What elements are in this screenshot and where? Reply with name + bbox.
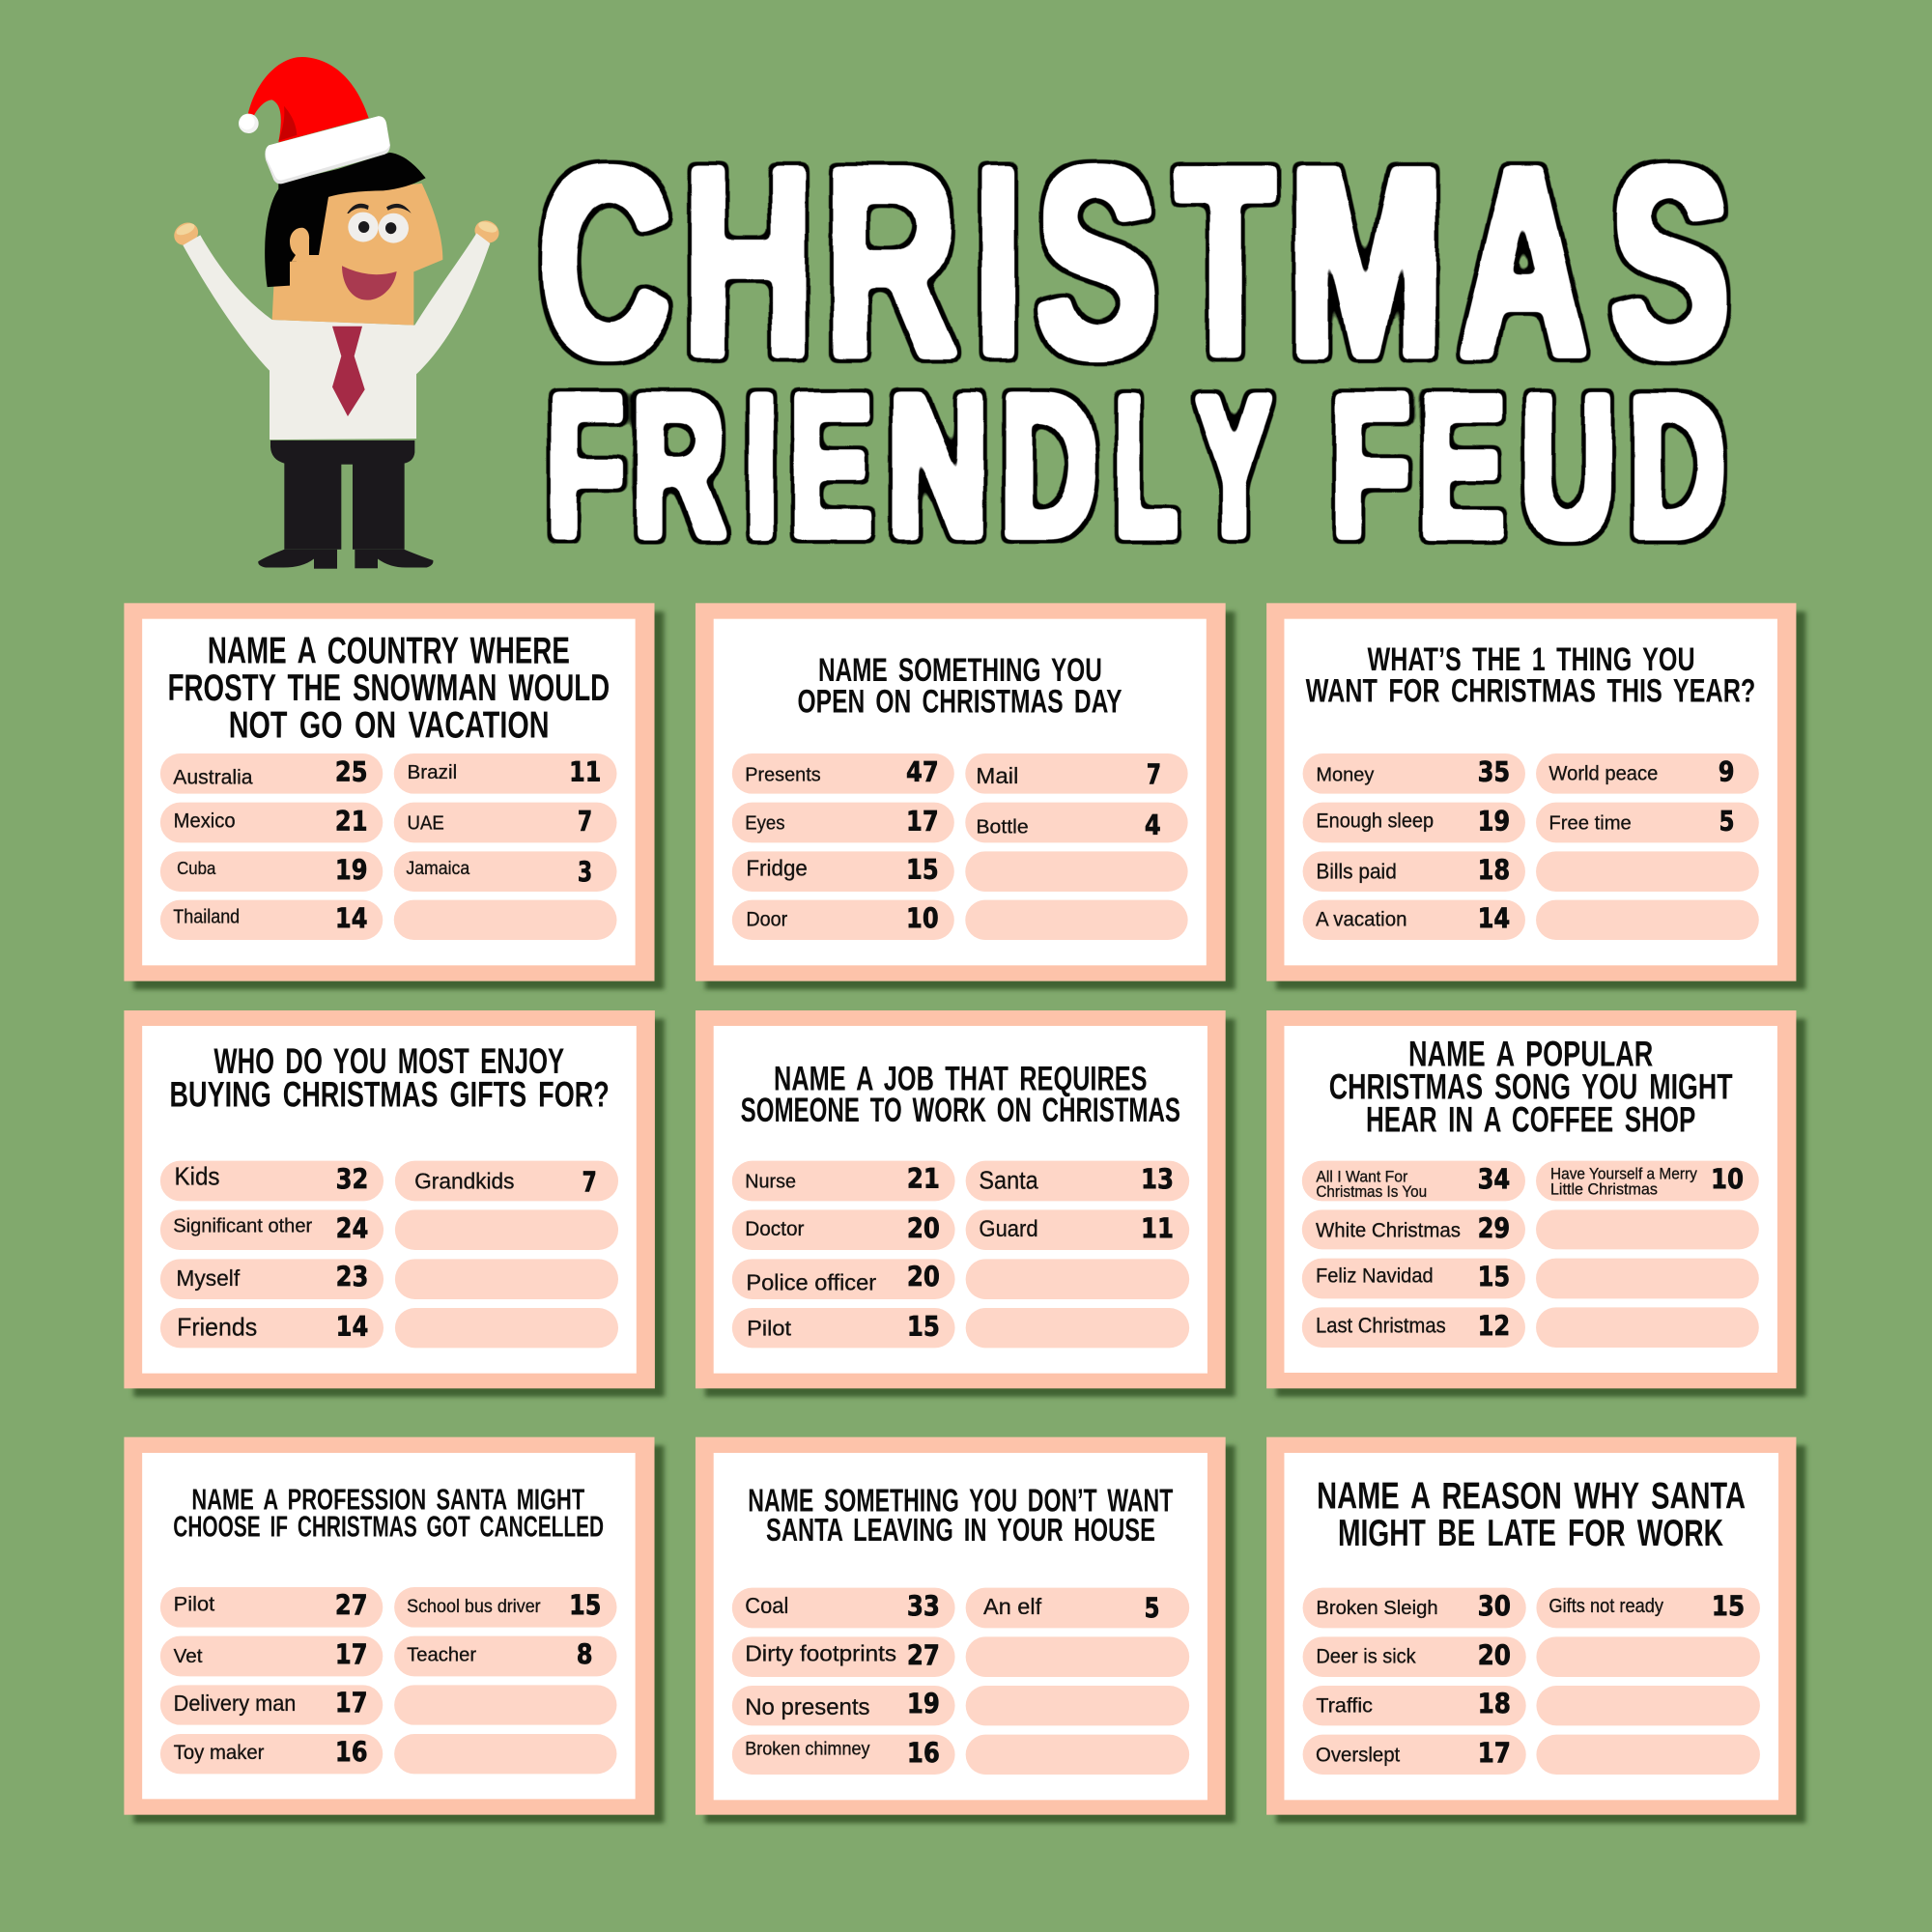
answer: Deer is sick 20: Deer is sick (1316, 1644, 1416, 1667)
empty answer pill (966, 1636, 1189, 1677)
title line: FRIENDLY FEUD: N (888, 352, 989, 580)
shirt and arms (183, 233, 490, 440)
left hand (171, 219, 201, 249)
heading: SOMEONE TO WORK ON CHRISTMAS (741, 1091, 1180, 1128)
trousers (270, 440, 414, 550)
answer: World peace 9: 9 (1719, 757, 1735, 788)
right hand (472, 217, 501, 246)
answer: Pilot 27: Pilot (174, 1592, 215, 1615)
heading: HEAR IN A COFFEE SHOP (1366, 1100, 1695, 1140)
panel: the 1 thing you want for Christmas (1266, 603, 1805, 989)
answer: Grandkids 7 (395, 1161, 618, 1201)
answer: Friends 14: Friends (177, 1313, 257, 1341)
answer: Kids 32: 32 (336, 1165, 368, 1196)
title (538, 112, 1730, 580)
heading: FROSTY THE SNOWMAN WOULD (168, 667, 610, 708)
character: cheering man in Santa hat (171, 57, 501, 569)
heading (798, 651, 1122, 720)
title line: CHRISTMAS: S (1036, 112, 1157, 413)
answer: Mexico 21: Mexico (174, 809, 236, 832)
panel: who you enjoy buying gifts for (124, 1010, 665, 1397)
answer: Overslept 17: 17 (1478, 1738, 1511, 1770)
title line: CHRISTMAS: I (974, 112, 1022, 413)
answer: Door 10 (732, 900, 954, 940)
answer: Friends 14 (160, 1308, 384, 1348)
title line: CHRISTMAS: A (1460, 112, 1587, 413)
answer: Guard 11: Guard (979, 1217, 1038, 1242)
answer: Gifts not ready 15: 15 (1712, 1591, 1745, 1623)
answer: Overslept 17 (1303, 1735, 1526, 1775)
answer: Brazil 11 (394, 753, 616, 794)
answer: All I Want For Christmas Is You 34: 34 (1478, 1165, 1510, 1196)
empty answer pill (1536, 1209, 1759, 1249)
answer: Presents 47 (732, 753, 954, 794)
answer: Teacher 8: Teacher (407, 1643, 477, 1665)
empty answer pill (395, 1308, 618, 1348)
answer: Broken chimney 16: Broken chimney (745, 1739, 870, 1759)
heading: NOT GO ON VACATION (229, 703, 549, 746)
empty answer pill (1536, 1259, 1759, 1298)
answer: Grandkids 7: 7 (582, 1167, 597, 1199)
answer: Teacher 8: 8 (577, 1639, 593, 1671)
answer: Mail 7: Mail (976, 764, 1018, 789)
answer: An elf 5: 5 (1144, 1593, 1160, 1625)
answer: Brazil 11: 11 (569, 757, 601, 788)
answer: Significant other 24: 24 (336, 1214, 368, 1245)
heading: NAME SOMETHING YOU (818, 651, 1102, 688)
empty answer pill (395, 1209, 618, 1250)
answer: Traffic 18 (1303, 1686, 1526, 1725)
answer: Pilot 27 (160, 1587, 383, 1628)
answer: Bills paid 18: 18 (1478, 856, 1510, 887)
answer: Grandkids 7: Grandkids (414, 1170, 514, 1194)
answer: All I Want For Christmas Is You 34: All I Want For (1316, 1167, 1407, 1185)
shoes (258, 550, 433, 569)
heading: NAME A POPULAR (1408, 1035, 1653, 1074)
answer: Coal 33: Coal (745, 1594, 788, 1619)
title line: CHRISTMAS: C (538, 112, 671, 413)
answer: World peace 9: World peace (1548, 762, 1658, 784)
answer: Pilot 15 (732, 1308, 955, 1348)
empty answer pill (394, 900, 616, 940)
answer: Santa 13: Santa (979, 1166, 1038, 1194)
eyebrows (347, 204, 412, 213)
answer: Money 35: Money (1316, 763, 1375, 785)
answer: Pilot 15: 15 (907, 1312, 940, 1343)
answer: Jamaica 3: Jamaica (406, 858, 470, 879)
empty answer pill (1536, 1735, 1760, 1775)
answer: Police officer 20: Police officer (746, 1271, 876, 1295)
title line: FRIENDLY FEUD: F (1331, 352, 1410, 580)
answer: Cuba 19: Cuba (177, 859, 216, 879)
panel: jobs that require working on Christmas (696, 1010, 1236, 1397)
answer: Delivery man 17 (160, 1685, 383, 1725)
answer: Broken chimney 16: 16 (907, 1738, 940, 1770)
answer: Mail 7: 7 (1147, 760, 1161, 791)
answer: Traffic 18: 18 (1478, 1689, 1511, 1720)
answer: Broken chimney 16 (732, 1735, 955, 1775)
heading: NAME A JOB THAT REQUIRES (774, 1060, 1148, 1097)
santa hat (239, 57, 390, 184)
answer: Dirty footprints 27 (732, 1636, 955, 1677)
answer: Santa 13 (966, 1161, 1189, 1201)
empty answer pill (966, 1259, 1189, 1299)
answer: School bus driver 15: 15 (569, 1591, 601, 1622)
heading (169, 1041, 610, 1115)
title line: FRIENDLY FEUD: I (746, 352, 777, 580)
title line: FRIENDLY FEUD: Y (1197, 352, 1271, 580)
answer: Coal 33: 33 (907, 1591, 940, 1623)
answer: Enough sleep 19: Enough sleep (1316, 809, 1434, 832)
empty answer pill (965, 900, 1188, 940)
answer: Presents 47: Presents (745, 763, 821, 785)
answer: Enough sleep 19 (1303, 803, 1525, 842)
answer: Have Yourself a Merry Little Christmas 10 (1536, 1161, 1759, 1201)
answer: Eyes 17: Eyes (745, 811, 785, 834)
answer: Toy maker 16: Toy maker (174, 1740, 265, 1764)
answer: Toy maker 16 (160, 1734, 383, 1774)
answer: Bottle 4 (965, 803, 1188, 842)
answer: Brazil 11: Brazil (408, 760, 457, 783)
answer: Teacher 8 (394, 1636, 616, 1676)
title line: CHRISTMAS: H (683, 112, 813, 413)
answer: Bills paid 18: Bills paid (1316, 861, 1397, 884)
answer: Mail 7 (965, 753, 1188, 794)
answer: School bus driver 15: School bus driver (407, 1596, 541, 1617)
heading (741, 1060, 1180, 1128)
tie (332, 327, 365, 416)
answer: Friends 14: 14 (336, 1312, 368, 1343)
answer: Kids 32 (160, 1161, 384, 1201)
empty answer pill (394, 1734, 616, 1774)
empty answer pill (394, 1685, 616, 1725)
empty answer pill (966, 1735, 1189, 1775)
empty answer pill (965, 851, 1188, 892)
panel: country Frosty would not visit (124, 603, 664, 989)
answer: Myself 23 (160, 1259, 384, 1299)
answer: Police officer 20: 20 (907, 1263, 940, 1293)
answer: Significant other 24 (160, 1209, 384, 1250)
answer: White Christmas 29: 29 (1478, 1214, 1510, 1245)
panel: reason Santa might be late for work (1266, 1437, 1805, 1823)
answer: Fridge 15: Fridge (746, 857, 808, 881)
answer: Pilot 15: Pilot (747, 1318, 791, 1341)
answer: Jamaica 3: 3 (578, 858, 592, 889)
answer: Significant other 24: Significant other (173, 1215, 312, 1236)
answer: Deer is sick 20 (1303, 1636, 1526, 1677)
answer: Mexico 21: 21 (335, 807, 368, 838)
answer: Bills paid 18 (1303, 851, 1525, 892)
heading (173, 1483, 604, 1544)
panel: popular Christmas song in a coffee shop (1266, 1010, 1805, 1397)
title line: FRIENDLY FEUD: R (633, 352, 724, 580)
answer: Bottle 4: Bottle (976, 815, 1029, 838)
empty answer pill (966, 1686, 1189, 1725)
answer: Australia 25: 25 (335, 757, 368, 788)
head (272, 184, 442, 326)
answer: Cuba 19: 19 (335, 856, 368, 887)
empty answer pill (395, 1259, 618, 1299)
answer: Delivery man 17: 17 (335, 1689, 368, 1719)
answer: Broken Sleigh 30: 30 (1478, 1591, 1511, 1623)
heading: NAME A PROFESSION SANTA MIGHT (191, 1483, 585, 1517)
answer: Myself 23: Myself (176, 1266, 241, 1292)
heading (168, 629, 610, 746)
answer: Free time 5: 5 (1719, 807, 1735, 838)
answer: Enough sleep 19: 19 (1478, 807, 1510, 838)
answer: Australia 25: Australia (173, 765, 253, 788)
answer: Thailand 14: 14 (335, 904, 368, 935)
title line: CHRISTMAS: S (1609, 112, 1730, 413)
title line: CHRISTMAS: T (1177, 112, 1275, 413)
answer: Feliz Navidad 15: 15 (1478, 1263, 1510, 1293)
answer: Free time 5 (1536, 803, 1759, 842)
answer: A vacation 14: A vacation (1316, 907, 1407, 930)
answer: Door 10: 10 (906, 904, 939, 935)
title line: CHRISTMAS: R (825, 112, 956, 413)
answer: Doctor 20: Doctor (745, 1216, 805, 1240)
ear (290, 228, 319, 262)
answer: Last Christmas 12: Last Christmas (1316, 1315, 1446, 1338)
answer: Free time 5: Free time (1548, 811, 1632, 834)
answer: UAE 7: UAE (408, 811, 444, 834)
panel: something you do not want Santa leaving (696, 1437, 1236, 1823)
answer: An elf 5: An elf (983, 1595, 1042, 1620)
answer: Last Christmas 12 (1302, 1307, 1525, 1348)
answer: No presents 19: 19 (907, 1689, 940, 1720)
empty answer pill (1536, 1686, 1760, 1725)
answer: Have Yourself a Merry Little Christmas 10: Have Yourself a Merry (1550, 1164, 1697, 1182)
answer: White Christmas 29 (1302, 1209, 1525, 1249)
title line: FRIENDLY FEUD: U (1521, 352, 1615, 580)
title line: FRIENDLY FEUD: L (1115, 352, 1177, 580)
answer: Broken Sleigh 30: Broken Sleigh (1316, 1596, 1438, 1619)
mouth (342, 266, 397, 300)
answer: An elf 5 (966, 1588, 1189, 1628)
title line: FRIENDLY FEUD: D (1001, 352, 1097, 580)
answer: Bottle 4: 4 (1145, 810, 1161, 841)
heading: NAME SOMETHING YOU DON’T WANT (748, 1483, 1174, 1519)
eyes (348, 213, 409, 243)
answer: Money 35: 35 (1478, 757, 1510, 788)
answer: Cuba 19 (160, 851, 383, 892)
answer: Dirty footprints 27: Dirty footprints (745, 1641, 896, 1666)
answer: Eyes 17 (732, 803, 954, 842)
heading: OPEN ON CHRISTMAS DAY (798, 683, 1122, 720)
heading (1329, 1035, 1733, 1140)
answer: UAE 7 (394, 803, 616, 842)
answer: Vet 17: 17 (335, 1639, 368, 1671)
empty answer pill (1536, 900, 1759, 940)
answer: Feliz Navidad 15: Feliz Navidad (1316, 1264, 1434, 1287)
title line: FRIENDLY FEUD: E (1418, 352, 1505, 580)
answer: A vacation 14: 14 (1478, 904, 1510, 935)
answer: Vet 17: Vet (174, 1644, 203, 1667)
answer: Broken Sleigh 30 (1303, 1588, 1526, 1628)
answer: Door 10: Door (746, 907, 787, 930)
answer: A vacation 14 (1303, 900, 1525, 940)
answer: Fridge 15: 15 (906, 855, 939, 886)
answer: Have Yourself a Merry Little Christmas 10: Little Christmas (1550, 1180, 1658, 1198)
heading: BUYING CHRISTMAS GIFTS FOR? (169, 1075, 610, 1115)
answer: Presents 47: 47 (906, 757, 939, 788)
panel: something you open on Christmas day (696, 603, 1236, 989)
answer: Fridge 15 (732, 851, 954, 892)
panel: profession Santa might choose (124, 1437, 664, 1823)
answer: Jamaica 3 (394, 851, 616, 892)
answer: Police officer 20 (732, 1259, 955, 1299)
answer: Dirty footprints 27: 27 (907, 1640, 940, 1672)
answer: Overslept 17: Overslept (1316, 1743, 1401, 1766)
answer: Santa 13: 13 (1141, 1165, 1174, 1196)
answer: Have Yourself a Merry Little Christmas 10: 10 (1711, 1165, 1744, 1196)
answer: Deer is sick 20: 20 (1478, 1640, 1511, 1672)
heading (748, 1483, 1174, 1548)
answer: Coal 33 (732, 1588, 955, 1628)
answer: Doctor 20 (732, 1209, 955, 1250)
heading: SANTA LEAVING IN YOUR HOUSE (766, 1512, 1155, 1548)
answer: Eyes 17: 17 (906, 807, 939, 838)
answer: White Christmas 29: White Christmas (1316, 1218, 1461, 1241)
answer: All I Want For Christmas Is You 34: Christmas Is You (1316, 1182, 1427, 1201)
answer: All I Want For Christmas Is You 34 (1302, 1161, 1525, 1201)
answer: Nurse 21: Nurse (745, 1170, 796, 1192)
answer: Guard 11: 11 (1141, 1214, 1174, 1245)
answer: Delivery man 17: Delivery man (174, 1691, 296, 1717)
answer: Australia 25 (160, 753, 383, 794)
heading: CHOOSE IF CHRISTMAS GOT CANCELLED (173, 1511, 604, 1544)
empty answer pill (1536, 1307, 1759, 1348)
heading (1306, 640, 1755, 709)
heading: NAME A COUNTRY WHERE (208, 629, 570, 671)
answer: Myself 23: 23 (336, 1263, 368, 1293)
empty answer pill (966, 1308, 1189, 1348)
heading: WHO DO YOU MOST ENJOY (213, 1041, 564, 1081)
answer: Thailand 14: Thailand (173, 906, 240, 927)
answer: Traffic 18: Traffic (1316, 1694, 1373, 1717)
answer: Nurse 21 (732, 1161, 955, 1201)
answer: World peace 9 (1536, 753, 1759, 794)
answer: Toy maker 16: 16 (335, 1737, 368, 1769)
answer: Kids 32: Kids (174, 1162, 220, 1190)
answer: Nurse 21: 21 (907, 1164, 940, 1195)
answer: No presents 19 (732, 1686, 955, 1725)
answer: UAE 7: 7 (578, 807, 592, 838)
answer: Mexico 21 (160, 803, 383, 842)
answer: Last Christmas 12: 12 (1478, 1311, 1510, 1343)
empty answer pill (1536, 851, 1759, 892)
answer: Pilot 27: 27 (335, 1591, 368, 1622)
title line: FRIENDLY FEUD: F (546, 352, 625, 580)
title line: FRIENDLY FEUD: D (1629, 352, 1726, 580)
answer: School bus driver 15 (394, 1587, 616, 1628)
answer: Feliz Navidad 15 (1302, 1259, 1525, 1298)
answer: Gifts not ready 15: Gifts not ready (1548, 1595, 1663, 1617)
heading (1317, 1474, 1746, 1553)
answer: Vet 17 (160, 1636, 383, 1676)
empty answer pill (1536, 1636, 1760, 1677)
answer: Guard 11 (966, 1209, 1189, 1250)
title line: FRIENDLY FEUD: E (789, 352, 873, 580)
title line: CHRISTMAS: M (1287, 112, 1444, 413)
answer: Gifts not ready 15 (1536, 1588, 1760, 1628)
answer: Thailand 14 (160, 900, 383, 940)
answer: Money 35 (1303, 753, 1525, 794)
hair (265, 153, 426, 287)
answer: Doctor 20: 20 (907, 1214, 940, 1245)
heading: WHAT’S THE 1 THING YOU (1368, 640, 1695, 677)
answer: No presents 19: No presents (745, 1695, 870, 1720)
